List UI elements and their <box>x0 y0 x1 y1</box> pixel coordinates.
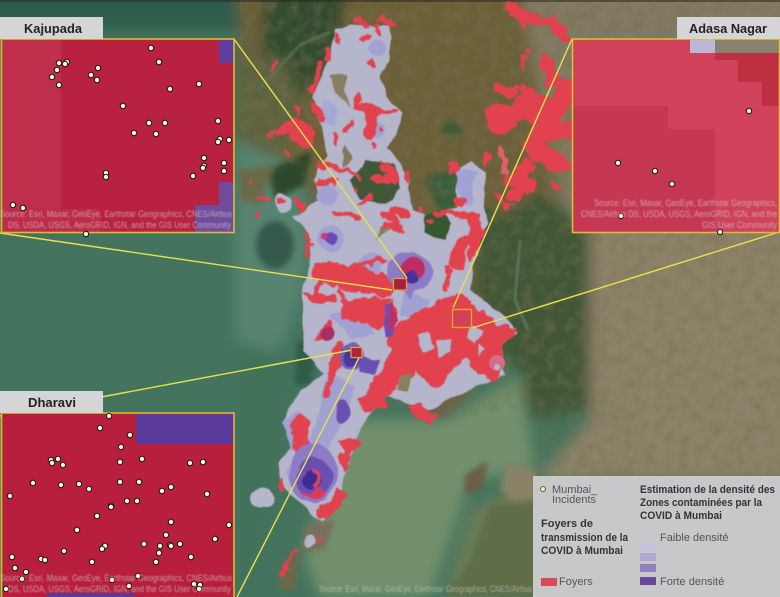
inset: Kajupada <box>0 39 234 237</box>
attribution: DS, USDA, USGS, AeroGRID, IGN, and the GIS User Community <box>8 220 231 230</box>
hotspot: Dharavi <box>339 342 365 368</box>
legend: hotspots heading: transmission de la <box>541 532 629 544</box>
inset: Dharavi <box>0 413 234 597</box>
central mixed patches <box>374 325 486 392</box>
locator: Adasa Nagar <box>452 310 472 328</box>
red central mass <box>358 295 517 412</box>
label: Dharavi <box>0 391 103 413</box>
label: Dharavi: Dharavi <box>28 395 76 410</box>
legend: hotspots heading: Foyers de <box>541 518 593 530</box>
hotspot overlay <box>253 5 572 575</box>
attribution: Source: Esri, Maxar, GeoEye, Earthstar Geographics, CNES/Airbus <box>0 573 232 583</box>
locator: Kajupada <box>394 278 406 290</box>
red south <box>298 420 355 453</box>
density overlay <box>251 25 517 548</box>
attribution <box>0 573 232 594</box>
label: Adasa Nagar <box>677 17 780 39</box>
legend: hotspots heading <box>541 518 629 557</box>
incident points <box>615 108 752 235</box>
legend: density scale: Forte densité <box>660 576 724 588</box>
locator: Dharavi <box>351 348 362 358</box>
label: Kajupada: Kajupada <box>24 21 83 36</box>
legend: incidents: Incidents <box>552 494 597 506</box>
attribution <box>0 209 232 230</box>
attribution: DS, USDA, USGS, AeroGRID, IGN, and the GIS User Community <box>8 584 231 594</box>
legend: density scale: Faible densité <box>660 532 728 544</box>
legend: density heading <box>640 484 775 522</box>
density: medium <box>318 100 336 125</box>
legend: hotspot swatch <box>541 576 593 588</box>
incident points <box>10 45 232 237</box>
legend: density heading: COVID à Mumbai <box>640 510 722 522</box>
label: Adasa Nagar: Adasa Nagar <box>689 21 767 36</box>
legend: hotspots heading: COVID à Mumbai <box>541 545 623 557</box>
hotspot: south <box>289 443 337 503</box>
density: low <box>278 25 517 523</box>
legend: density scale <box>640 532 728 588</box>
red north-east <box>510 5 566 38</box>
map attribution: Source: Esri, Maxar, GeoEye, Earthstar Geographics, CNES/Airbus <box>319 584 532 594</box>
attribution <box>581 198 777 230</box>
inset: Adasa Nagar <box>572 39 780 235</box>
legend: hotspot swatch: Foyers <box>559 576 593 588</box>
label: Kajupada <box>0 17 103 39</box>
attribution: Source: Esri, Maxar, GeoEye, Earthstar Geographics, CNES/Airbus <box>0 209 232 219</box>
incident points <box>3 413 232 592</box>
hotspot: Kajupada <box>389 251 431 293</box>
legend: incidents: Mumbai_ <box>552 484 598 496</box>
land gaps <box>330 76 352 108</box>
legend panel <box>533 476 780 597</box>
hotspot: Worli <box>335 399 351 425</box>
legend: density heading: Zones contaminées par la <box>640 497 763 509</box>
legend: incidents <box>541 484 598 506</box>
